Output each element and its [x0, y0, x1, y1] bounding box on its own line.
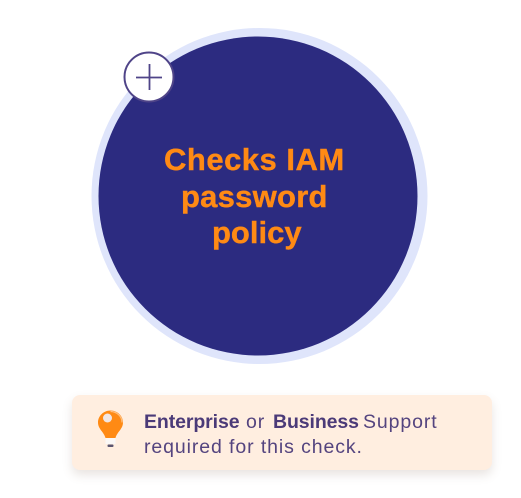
heading: checks IAM password policy: policy — [212, 215, 302, 250]
heading: checks IAM password policy: Checks IAM — [164, 142, 345, 177]
heading: checks IAM password policy — [164, 142, 345, 250]
icon: plus button — [124, 52, 174, 102]
callout text: Business — [273, 411, 359, 433]
callout text: required for this check. — [144, 436, 363, 458]
icon: light bulb — [98, 410, 123, 447]
callout text: or — [246, 411, 265, 433]
heading: checks IAM password policy: password — [181, 179, 328, 214]
callout text: Support — [363, 411, 438, 433]
callout text: Enterprise — [144, 411, 239, 433]
callout text — [144, 411, 438, 458]
callout: support requirement — [72, 395, 492, 470]
outer ring — [92, 28, 428, 364]
inner navy disc — [98, 36, 418, 356]
